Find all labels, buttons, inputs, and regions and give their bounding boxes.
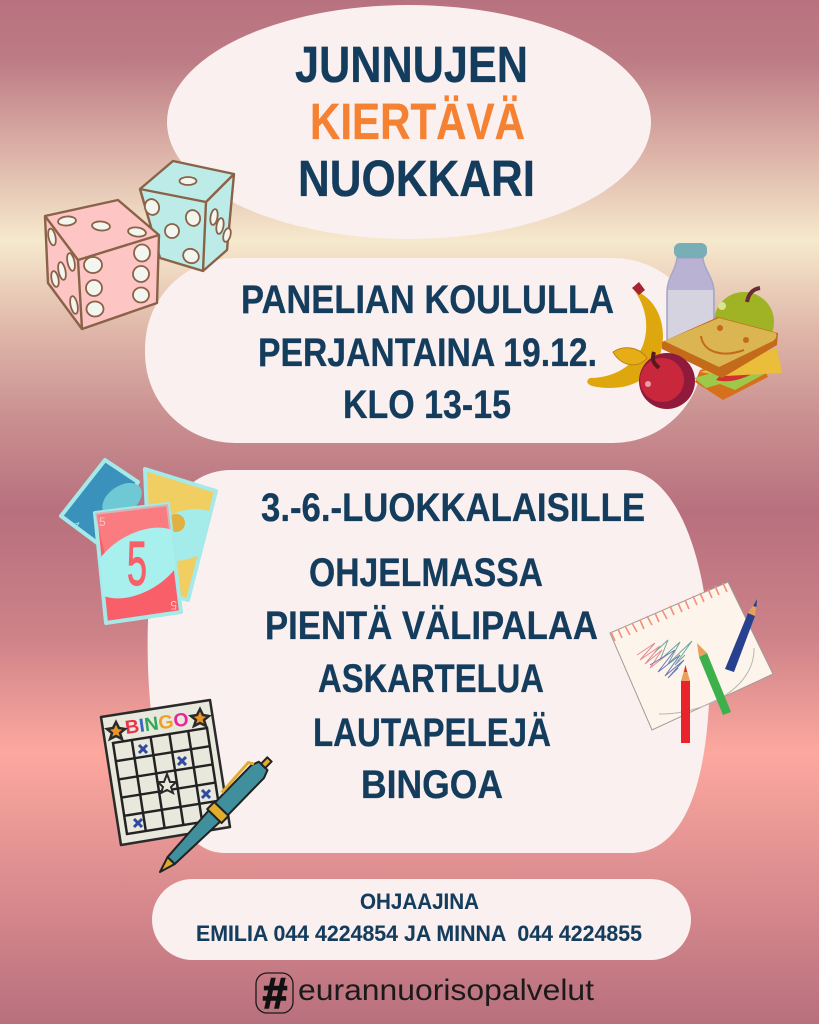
place: PANELIAN KOULULLA bbox=[241, 278, 614, 322]
centre star bbox=[158, 774, 176, 793]
panel: place and time bbox=[145, 258, 703, 443]
title line 3: NUOKKARI bbox=[298, 150, 535, 207]
target group: 3.-6.-LUOKKALAISILLE bbox=[261, 486, 645, 530]
hashtag glyph: # bbox=[263, 969, 287, 1018]
red card: 5 bbox=[170, 598, 177, 612]
arc line bbox=[659, 648, 754, 714]
yellow card bbox=[143, 467, 218, 602]
panel: programme bbox=[148, 470, 710, 853]
blue card: 4 bbox=[70, 519, 82, 532]
date: PERJANTAINA 19.12. bbox=[258, 331, 597, 375]
blue pencil bbox=[725, 599, 757, 672]
item: bingo: BINGOA bbox=[361, 763, 503, 807]
bingo word: BINGO bbox=[124, 709, 190, 739]
instructors contacts: EMILIA 044 4224854 JA MINNA 044 4224855 bbox=[196, 921, 642, 946]
banana bbox=[587, 282, 663, 388]
spiral binding bbox=[611, 583, 727, 641]
icon: pink die bbox=[45, 200, 159, 329]
place and time text bbox=[241, 278, 614, 427]
icon: blue die bbox=[140, 161, 234, 271]
hashtag handle: eurannuorisopalvelut bbox=[298, 974, 595, 1007]
star left bbox=[107, 722, 125, 739]
item: crafts: ASKARTELUA bbox=[318, 657, 544, 701]
red card bbox=[93, 502, 183, 625]
bingo card bbox=[101, 700, 230, 845]
scribble bbox=[637, 640, 692, 678]
icon: dice bbox=[45, 161, 234, 329]
icon: playing cards bbox=[61, 460, 229, 623]
icon: snack bbox=[587, 243, 782, 409]
marks bbox=[134, 745, 210, 827]
star right bbox=[191, 709, 209, 726]
title line 2: KIERTÄVÄ bbox=[310, 93, 525, 150]
icon: bingo card and pen bbox=[101, 700, 277, 879]
programme heading: OHJELMASSA bbox=[309, 551, 543, 595]
red apple bbox=[639, 352, 695, 409]
blue card bbox=[61, 460, 148, 545]
green pencil bbox=[697, 643, 731, 715]
pen bbox=[151, 750, 277, 879]
panel: title ellipse bbox=[167, 5, 651, 239]
instructors text bbox=[196, 889, 642, 946]
time: KLO 13-15 bbox=[343, 383, 511, 427]
panel: instructors bbox=[152, 879, 691, 960]
title bbox=[295, 36, 535, 207]
icon: sketchpad with pencils bbox=[610, 582, 773, 743]
red card: 5 bbox=[99, 515, 106, 529]
title line 1: JUNNUJEN bbox=[295, 36, 528, 93]
programme text bbox=[261, 486, 645, 807]
hashtag logo bbox=[256, 969, 595, 1018]
sketchpad bbox=[610, 582, 773, 730]
milk bottle bbox=[667, 243, 714, 345]
item: board games: LAUTAPELEJÄ bbox=[313, 711, 551, 755]
green apple bbox=[714, 288, 774, 352]
item: snack: PIENTÄ VÄLIPALAA bbox=[265, 604, 598, 648]
hashtag frame bbox=[256, 973, 293, 1013]
red card: 5 bbox=[127, 530, 147, 599]
sandwich bbox=[662, 317, 782, 400]
bingo grid bbox=[113, 728, 221, 834]
instructors heading: OHJAAJINA bbox=[360, 889, 479, 914]
red pencil bbox=[681, 665, 690, 743]
